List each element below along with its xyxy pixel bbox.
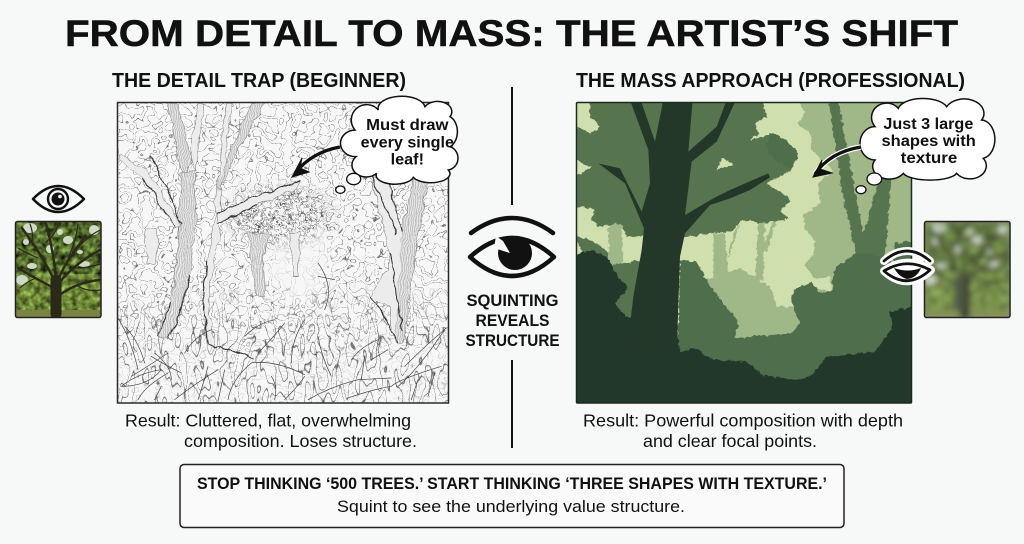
arrow outline: mass: [815, 147, 861, 174]
result text: detail: [125, 410, 417, 451]
heading: detail trap: THE DETAIL TRAP (BEGINNER): [112, 69, 406, 92]
result text: detail: composition. Loses structure.: [184, 431, 417, 451]
panel: massed shapes: [572, 98, 917, 410]
centre caption: SQUINTING: [466, 291, 558, 310]
result text: detail: Result: Cluttered, flat, overwhelming: [125, 410, 411, 430]
result text: mass: [583, 410, 903, 451]
far foliage and distant trunks: [797, 103, 911, 322]
callout box: Squint to see the underlying value structure.: [337, 497, 685, 516]
icon: squinting eye: [470, 218, 554, 276]
thought bubble: detail: every single: [361, 134, 454, 151]
divider bottom: [511, 360, 513, 448]
mid canopy: [572, 98, 798, 237]
arrowhead: detail: [292, 158, 309, 177]
divider top: [511, 87, 513, 205]
callout box: [180, 464, 844, 528]
arrow shaft: mass: [815, 147, 861, 174]
centre caption: REVEALS: [476, 311, 550, 330]
title: FROM DETAIL TO MASS: THE ARTIST’S SHIFT: [65, 12, 958, 54]
thought bubble: mass: [856, 98, 995, 194]
arrow: detail bubble to leaves: [295, 147, 340, 173]
thought bubble: mass: shapes with: [881, 133, 976, 150]
icon: half-closed eye: [884, 251, 931, 281]
thought bubble: detail: Must draw: [366, 117, 449, 134]
thought bubble: detail: [336, 96, 458, 193]
left low foliage: [577, 236, 640, 318]
far trunks: [828, 98, 892, 257]
thought bubble: mass: texture: [901, 150, 957, 167]
centre caption: [466, 291, 560, 350]
photo: detailed tree: [16, 222, 101, 318]
photo: blurred tree: [924, 220, 1011, 318]
result text: mass: and clear focal points.: [643, 431, 817, 451]
foreground blades: [118, 263, 446, 401]
thought bubble: detail: leaf!: [391, 152, 424, 169]
icon: open eye: [33, 186, 84, 212]
thought bubble: mass: Just 3 large: [883, 116, 973, 133]
mid bushes: [677, 240, 911, 380]
panel: detailed sketch: [118, 102, 449, 403]
main tree: [598, 100, 770, 353]
lightest sky: [577, 103, 833, 338]
heading: mass approach: THE MASS APPROACH (PROFESSIONAL): [576, 69, 965, 92]
arrowhead: mass: [813, 160, 832, 177]
centre caption: STRUCTURE: [466, 331, 560, 350]
callout box: STOP THINKING ‘500 TREES.’ START THINKING ‘THREE SHAPES WITH TEXTURE.’: [197, 474, 827, 493]
result text: mass: Result: Powerful composition with depth: [583, 410, 903, 430]
dark foreground: [572, 250, 917, 410]
